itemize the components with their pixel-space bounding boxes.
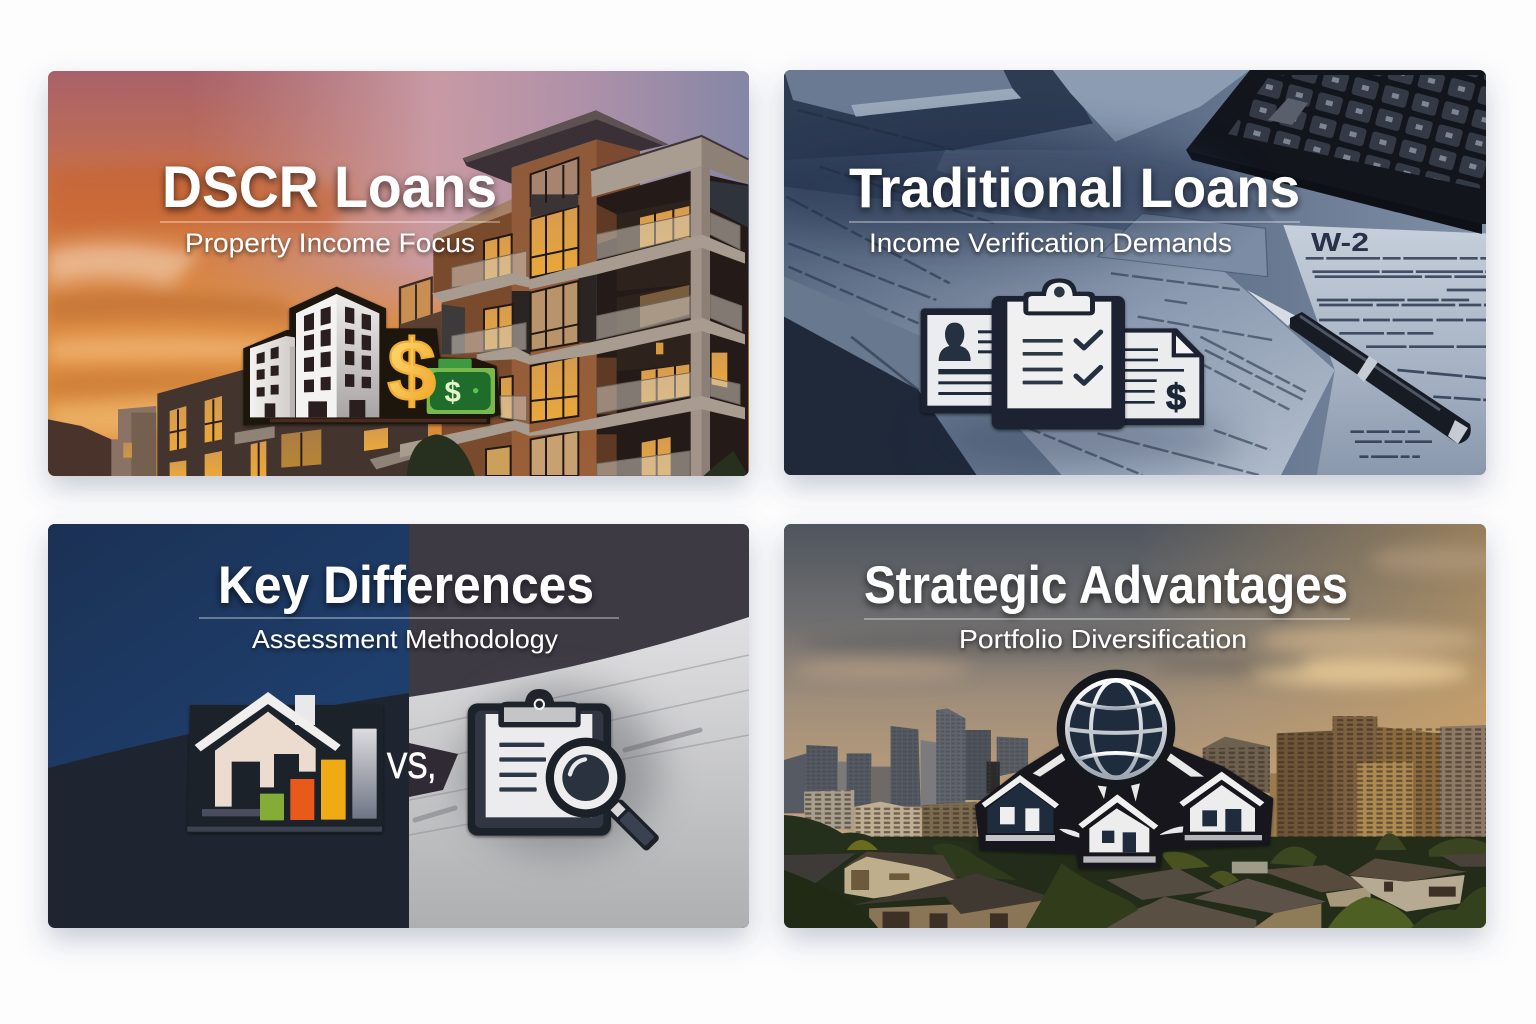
tower (400, 110, 748, 476)
icon: buildings with dollar and cash (243, 287, 501, 425)
icon: buildings with dollar and cash: $ (387, 322, 436, 420)
subtitle: Assessment Methodology: Assessment Methodology (252, 624, 558, 654)
lower wing, hills (48, 370, 428, 476)
icon: house with bar chart (187, 692, 383, 833)
title: Strategic Advantages: Strategic Advantages (864, 556, 1348, 615)
photo: city skyline and homes at dusk (784, 524, 1510, 928)
arrow: VS label pointer (409, 743, 458, 797)
photo: apartment building at sunset (48, 71, 749, 476)
label: W-2 form: W-2 (1311, 227, 1369, 257)
photo: paperwork, calculator and pen (760, 70, 1486, 475)
houses (784, 854, 855, 883)
panel: Traditional Loans (760, 70, 1486, 475)
icon: ID card, clipboard checklist and dollar document: $ (1166, 376, 1186, 417)
subtitle: Income Verification Demands: Income Verification Demands (869, 228, 1232, 258)
foreground trees (784, 870, 878, 928)
panel: Key Differences (48, 524, 749, 928)
panel: DSCR Loans (48, 71, 749, 476)
background: split navy and paper textures (48, 524, 749, 928)
icon: clipboard with magnifying glass (468, 689, 660, 852)
title: Traditional Loans: Traditional Loans (849, 156, 1300, 219)
label: VS: VS, (387, 745, 436, 786)
title: DSCR Loans: DSCR Loans (162, 155, 497, 220)
panel: Strategic Advantages (784, 524, 1510, 928)
icon: buildings with dollar and cash: $ (445, 376, 461, 409)
icon: ID card, clipboard checklist and dollar document (921, 278, 1204, 429)
columns and slabs (690, 167, 702, 476)
windows (484, 158, 578, 476)
title: Key Differences: Key Differences (218, 556, 594, 615)
pen (1247, 290, 1296, 326)
glass balustrades (452, 213, 742, 476)
subtitle: Property Income Focus: Property Income Focus (185, 228, 475, 258)
icon: globe connected to three houses (975, 670, 1273, 868)
subtitle: Portfolio Diversification: Portfolio Diversification (959, 624, 1247, 654)
